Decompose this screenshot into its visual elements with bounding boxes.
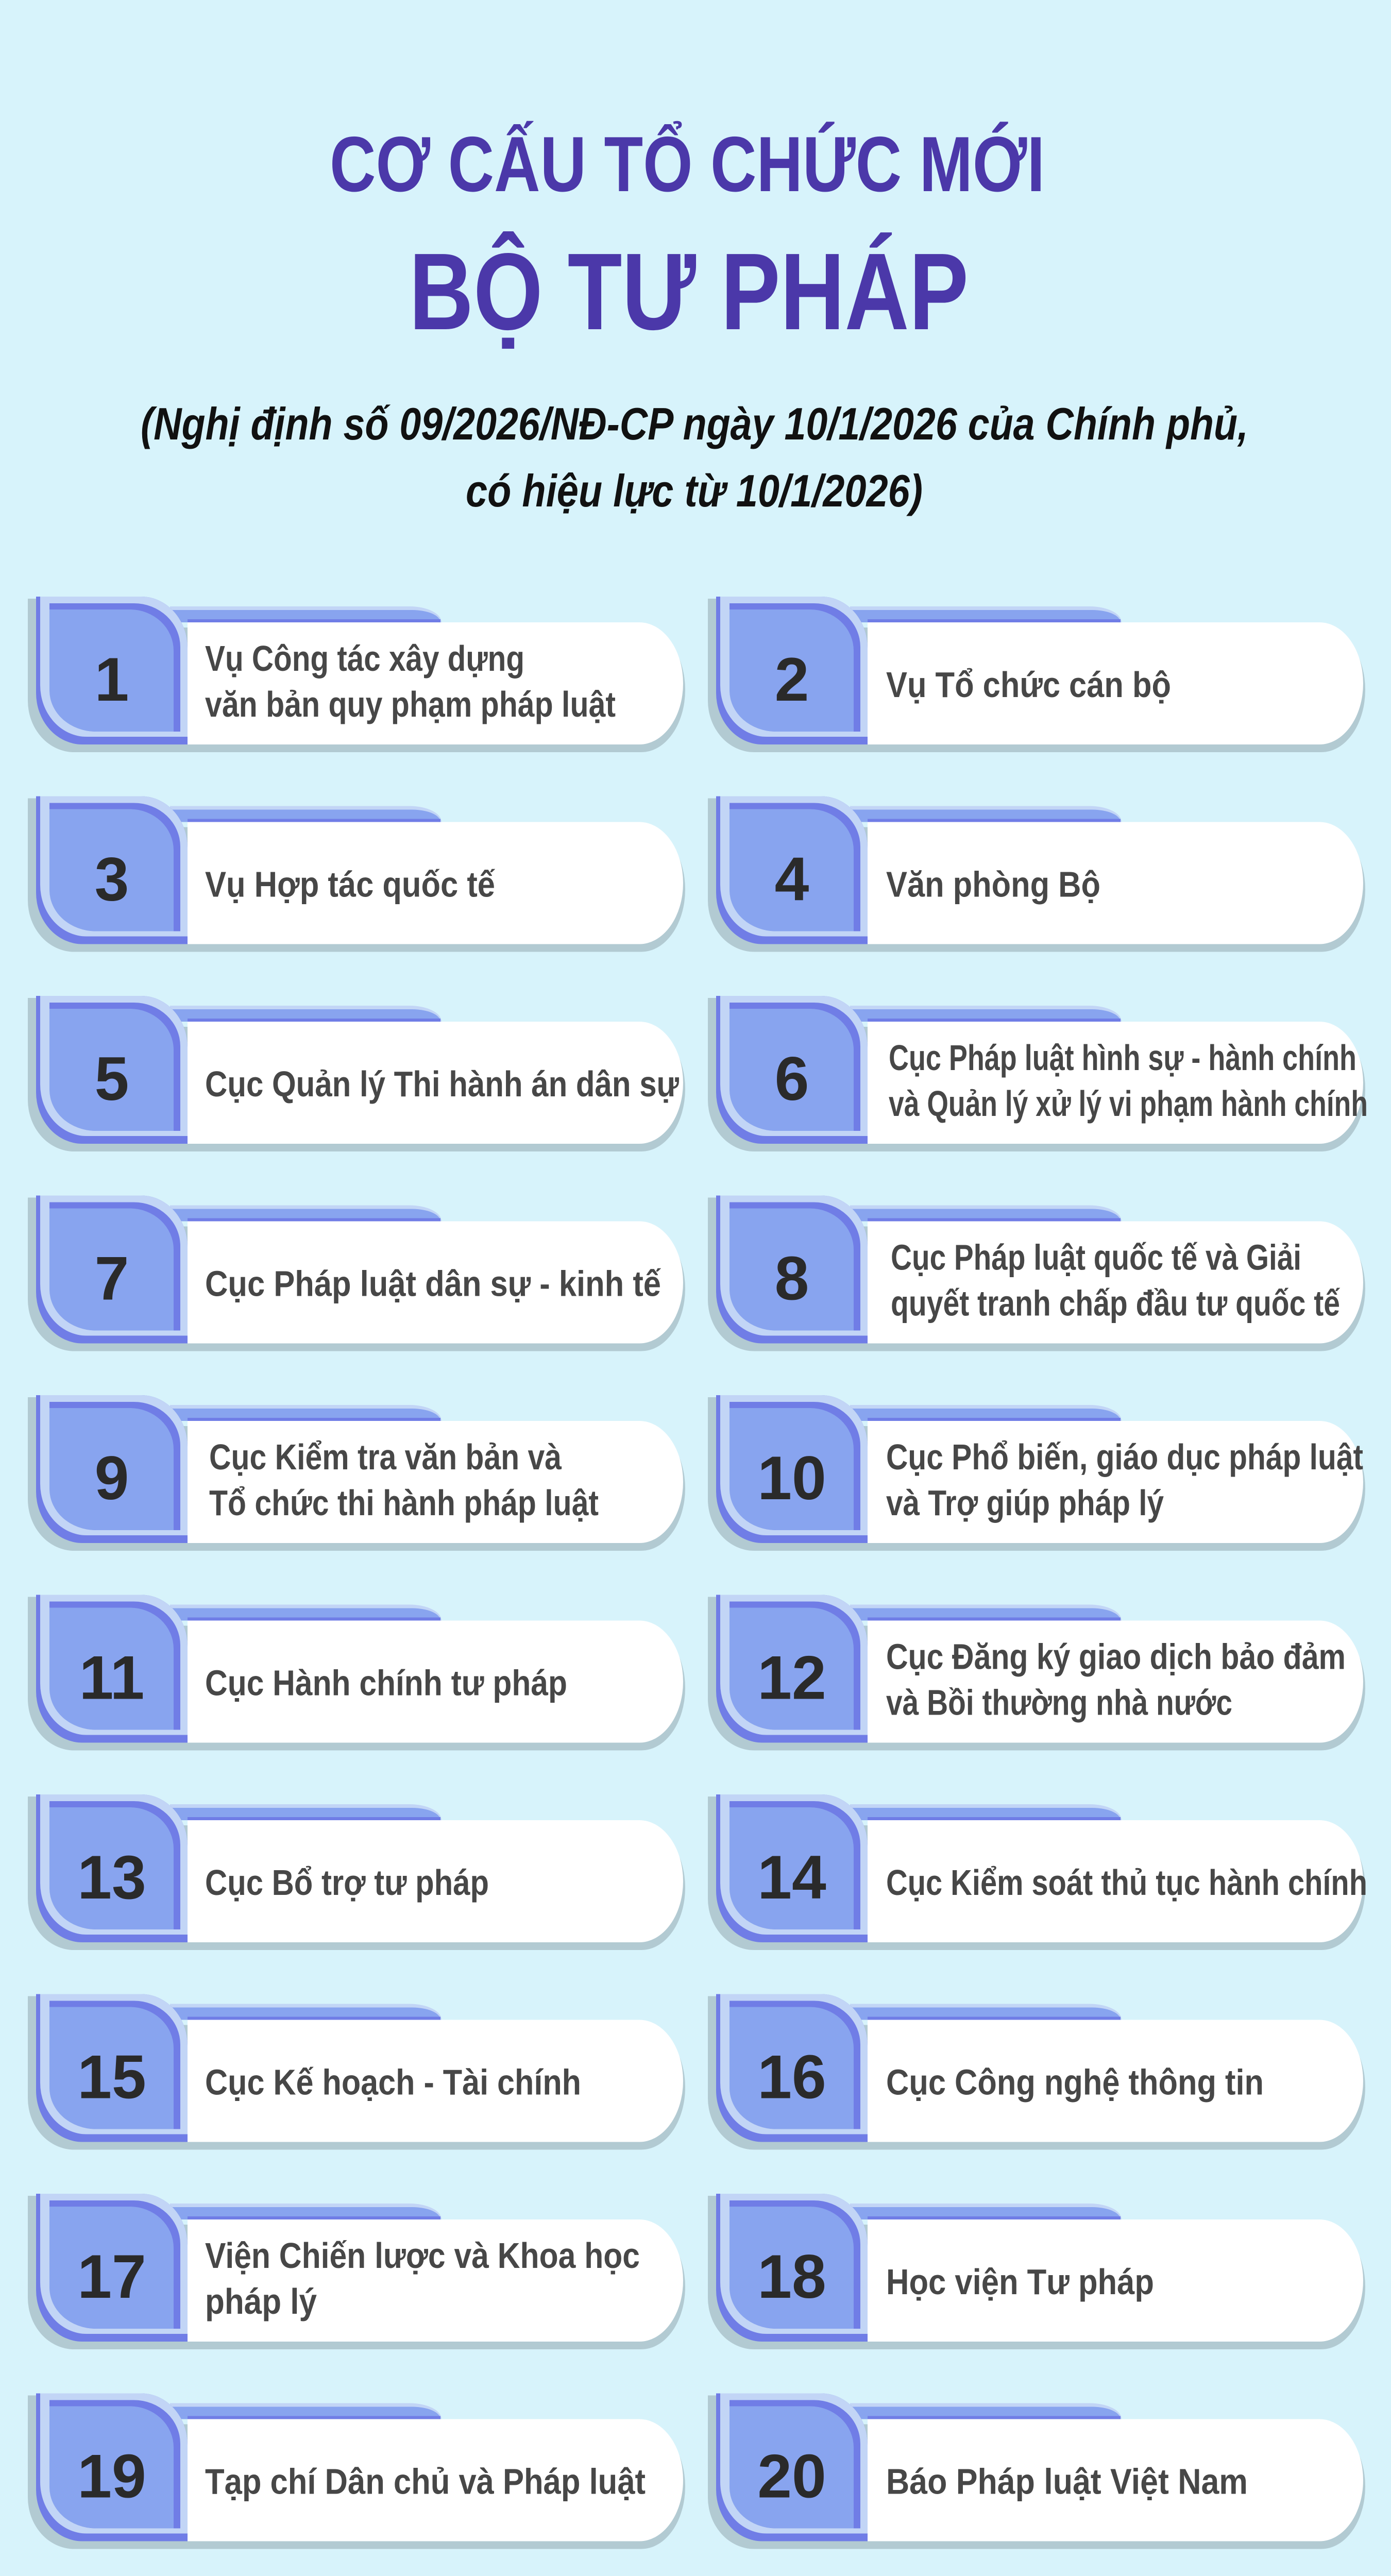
card 13	[28, 1794, 685, 1950]
card 9: Tổ chức thi hành pháp luật	[209, 1483, 599, 1523]
card 18: 18	[757, 2242, 826, 2311]
card 9: Cục Kiểm tra văn bản và	[209, 1437, 562, 1477]
card 2: 2	[775, 645, 809, 714]
card 3: Vụ Hợp tác quốc tế	[205, 865, 495, 905]
card 15: Cục Kế hoạch - Tài chính	[205, 2062, 581, 2102]
card 18: Học viện Tư pháp	[886, 2262, 1154, 2302]
card 15	[28, 1994, 685, 2149]
card 14: 14	[757, 1843, 826, 1912]
card 20: 20	[757, 2442, 826, 2511]
card 1: văn bản quy phạm pháp luật	[205, 684, 616, 724]
card 1: 1	[95, 645, 129, 714]
card 11: 11	[79, 1643, 144, 1713]
card 8: 8	[775, 1244, 809, 1313]
card 12	[708, 1595, 1365, 1751]
title: BỘ TƯ PHÁP	[409, 230, 969, 352]
card 17: 17	[77, 2242, 146, 2311]
card 6: 6	[775, 1044, 809, 1113]
card 11	[28, 1595, 685, 1751]
card 13: Cục Bổ trợ tư pháp	[205, 1862, 489, 1903]
card 4	[708, 796, 1365, 952]
card 20	[708, 2394, 1365, 2549]
card 10: 10	[757, 1444, 826, 1513]
card 19: Tạp chí Dân chủ và Pháp luật	[205, 2462, 646, 2502]
card 8	[708, 1195, 1365, 1351]
card 13: 13	[77, 1843, 146, 1912]
card 9: 9	[95, 1444, 129, 1513]
card 16	[708, 1994, 1365, 2149]
card 5	[28, 996, 685, 1151]
card 17	[28, 2194, 685, 2349]
card 6	[708, 996, 1368, 1151]
card 1	[28, 597, 685, 752]
card 14	[708, 1794, 1367, 1950]
card 3	[28, 796, 685, 952]
card 10	[708, 1395, 1365, 1551]
card 15: 15	[77, 2042, 146, 2111]
subtitle: có hiệu lực từ 10/1/2026)	[466, 465, 923, 516]
card 4: 4	[775, 845, 809, 914]
card 5: Cục Quản lý Thi hành án dân sự	[205, 1064, 679, 1104]
card 2	[708, 597, 1365, 752]
card 9	[28, 1395, 685, 1551]
card 16: 16	[757, 2042, 826, 2111]
card 8: Cục Pháp luật quốc tế và Giải	[891, 1238, 1301, 1278]
card 12: và Bồi thường nhà nước	[886, 1683, 1232, 1723]
card 7: Cục Pháp luật dân sự - kinh tế	[205, 1263, 661, 1303]
card 17: Viện Chiến lược và Khoa học	[205, 2235, 640, 2276]
card 11: Cục Hành chính tư pháp	[205, 1663, 567, 1703]
card 19	[28, 2394, 685, 2549]
card 7	[28, 1195, 685, 1351]
card 4: Văn phòng Bộ	[886, 865, 1100, 905]
card 2: Vụ Tổ chức cán bộ	[886, 665, 1171, 705]
card 17: pháp lý	[205, 2281, 317, 2321]
card 12: 12	[757, 1643, 826, 1713]
card 3: 3	[95, 845, 129, 914]
card 5: 5	[95, 1044, 129, 1113]
title	[330, 121, 1045, 352]
card 16: Cục Công nghệ thông tin	[886, 2062, 1264, 2102]
card 20: Báo Pháp luật Việt Nam	[886, 2462, 1248, 2502]
card 7: 7	[95, 1244, 129, 1313]
card 1: Vụ Công tác xây dựng	[205, 638, 524, 679]
subtitle	[141, 398, 1248, 516]
card 10: và Trợ giúp pháp lý	[886, 1483, 1164, 1523]
card 19: 19	[77, 2442, 146, 2511]
title: CƠ CẤU TỔ CHỨC MỚI	[330, 121, 1045, 208]
card 18	[708, 2194, 1365, 2349]
